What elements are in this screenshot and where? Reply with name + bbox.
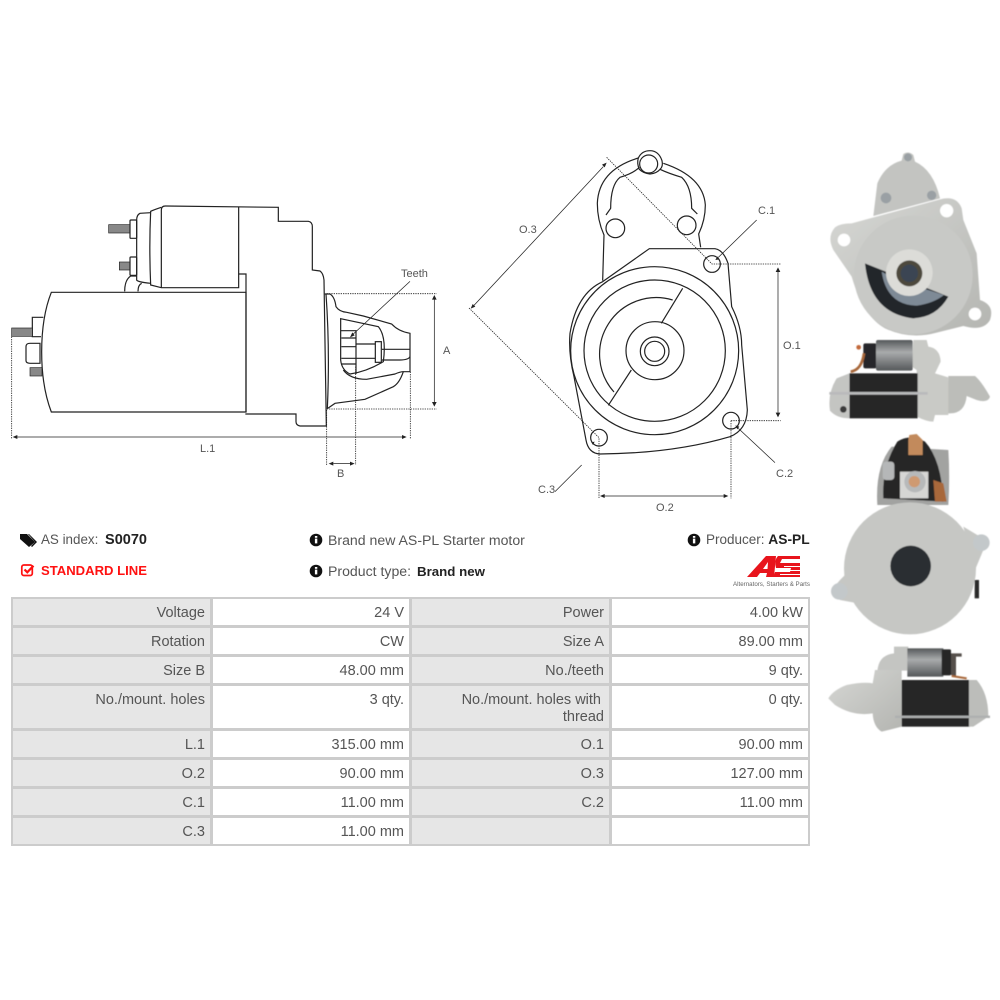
icon: info 2 bbox=[310, 565, 322, 577]
specification table: 11.00 mm bbox=[341, 795, 404, 811]
specification table: C.3 bbox=[182, 824, 205, 840]
specification table: No./mount. holes bbox=[95, 692, 205, 708]
specification table: 48.00 mm bbox=[340, 663, 404, 679]
specification table: Power bbox=[563, 605, 604, 621]
logo: AS: Alternators, Starters & Parts bbox=[733, 581, 810, 588]
description: Brand new AS-PL Starter motor bbox=[328, 532, 525, 548]
AS index: AS index: S0070 bbox=[41, 532, 147, 548]
specification table bbox=[11, 597, 810, 846]
icon: tags bbox=[20, 534, 37, 547]
specification table: Size B bbox=[163, 663, 205, 679]
specification table: 127.00 mm bbox=[730, 766, 803, 782]
specification table: 24 V bbox=[374, 605, 404, 621]
specification table: 90.00 mm bbox=[340, 766, 404, 782]
specification table: O.2 bbox=[182, 766, 205, 782]
photo: starter side view with nose right bbox=[829, 340, 990, 422]
photo: starter rear view bbox=[831, 434, 990, 634]
specification table: O.3 bbox=[581, 766, 604, 782]
logo: AS bbox=[733, 556, 810, 588]
front view labels: O.1 bbox=[783, 340, 801, 352]
side view: drive nose bbox=[325, 294, 410, 409]
side view labels: Teeth bbox=[401, 268, 428, 280]
side view labels: A bbox=[443, 345, 451, 357]
specification table: 0 qty. bbox=[769, 692, 803, 708]
side view labels: L.1 bbox=[200, 443, 215, 455]
specification table: Rotation bbox=[151, 634, 205, 650]
icon: info 3 bbox=[688, 534, 700, 546]
specification table: 9 qty. bbox=[769, 663, 803, 679]
specification table: 11.00 mm bbox=[341, 824, 404, 840]
side view labels: B bbox=[337, 468, 344, 480]
specification table: 315.00 mm bbox=[331, 737, 404, 753]
icon: info 1 bbox=[310, 534, 322, 546]
specification table: O.1 bbox=[581, 737, 604, 753]
specification table: CW bbox=[380, 634, 404, 650]
front view labels bbox=[519, 205, 801, 514]
side view: motor body bbox=[12, 292, 246, 412]
specification table: No./mount. holes with bbox=[462, 692, 601, 708]
front view labels: C.1 bbox=[758, 205, 775, 217]
specification table: L.1 bbox=[185, 737, 205, 753]
specification table: Size A bbox=[563, 634, 604, 650]
dimension lines bbox=[12, 281, 437, 466]
producer: Producer: AS-PL bbox=[706, 532, 810, 547]
front view: flange bbox=[570, 249, 747, 454]
specification table: 3 qty. bbox=[370, 692, 404, 708]
photo: starter front flange bbox=[830, 153, 991, 335]
specification table: 11.00 mm bbox=[740, 795, 803, 811]
specification table: 89.00 mm bbox=[739, 634, 803, 650]
product type: Product type: Brand new bbox=[328, 563, 485, 579]
front view labels: C.3 bbox=[538, 484, 555, 496]
front view: dimension lines bbox=[469, 157, 781, 498]
icon: red check square bbox=[22, 565, 34, 576]
side view labels bbox=[200, 268, 451, 480]
specification table: 4.00 kW bbox=[750, 605, 803, 621]
front view labels: O.3 bbox=[519, 224, 537, 236]
technical drawing: front view bbox=[469, 151, 781, 498]
specification table: 90.00 mm bbox=[739, 737, 803, 753]
technical drawing: side view bbox=[12, 206, 437, 466]
front view labels: O.2 bbox=[656, 502, 674, 514]
photo: starter side view with nose left bbox=[828, 647, 990, 732]
specification table: C.2 bbox=[581, 795, 604, 811]
specification table: thread bbox=[563, 709, 604, 725]
front view labels: C.2 bbox=[776, 468, 793, 480]
standard line: STANDARD LINE bbox=[41, 563, 147, 578]
specification table: C.1 bbox=[182, 795, 205, 811]
front view: upper housing bbox=[597, 151, 705, 281]
specification table: Voltage bbox=[157, 605, 205, 621]
specification table: No./teeth bbox=[545, 663, 604, 679]
side view: solenoid bbox=[109, 206, 326, 426]
